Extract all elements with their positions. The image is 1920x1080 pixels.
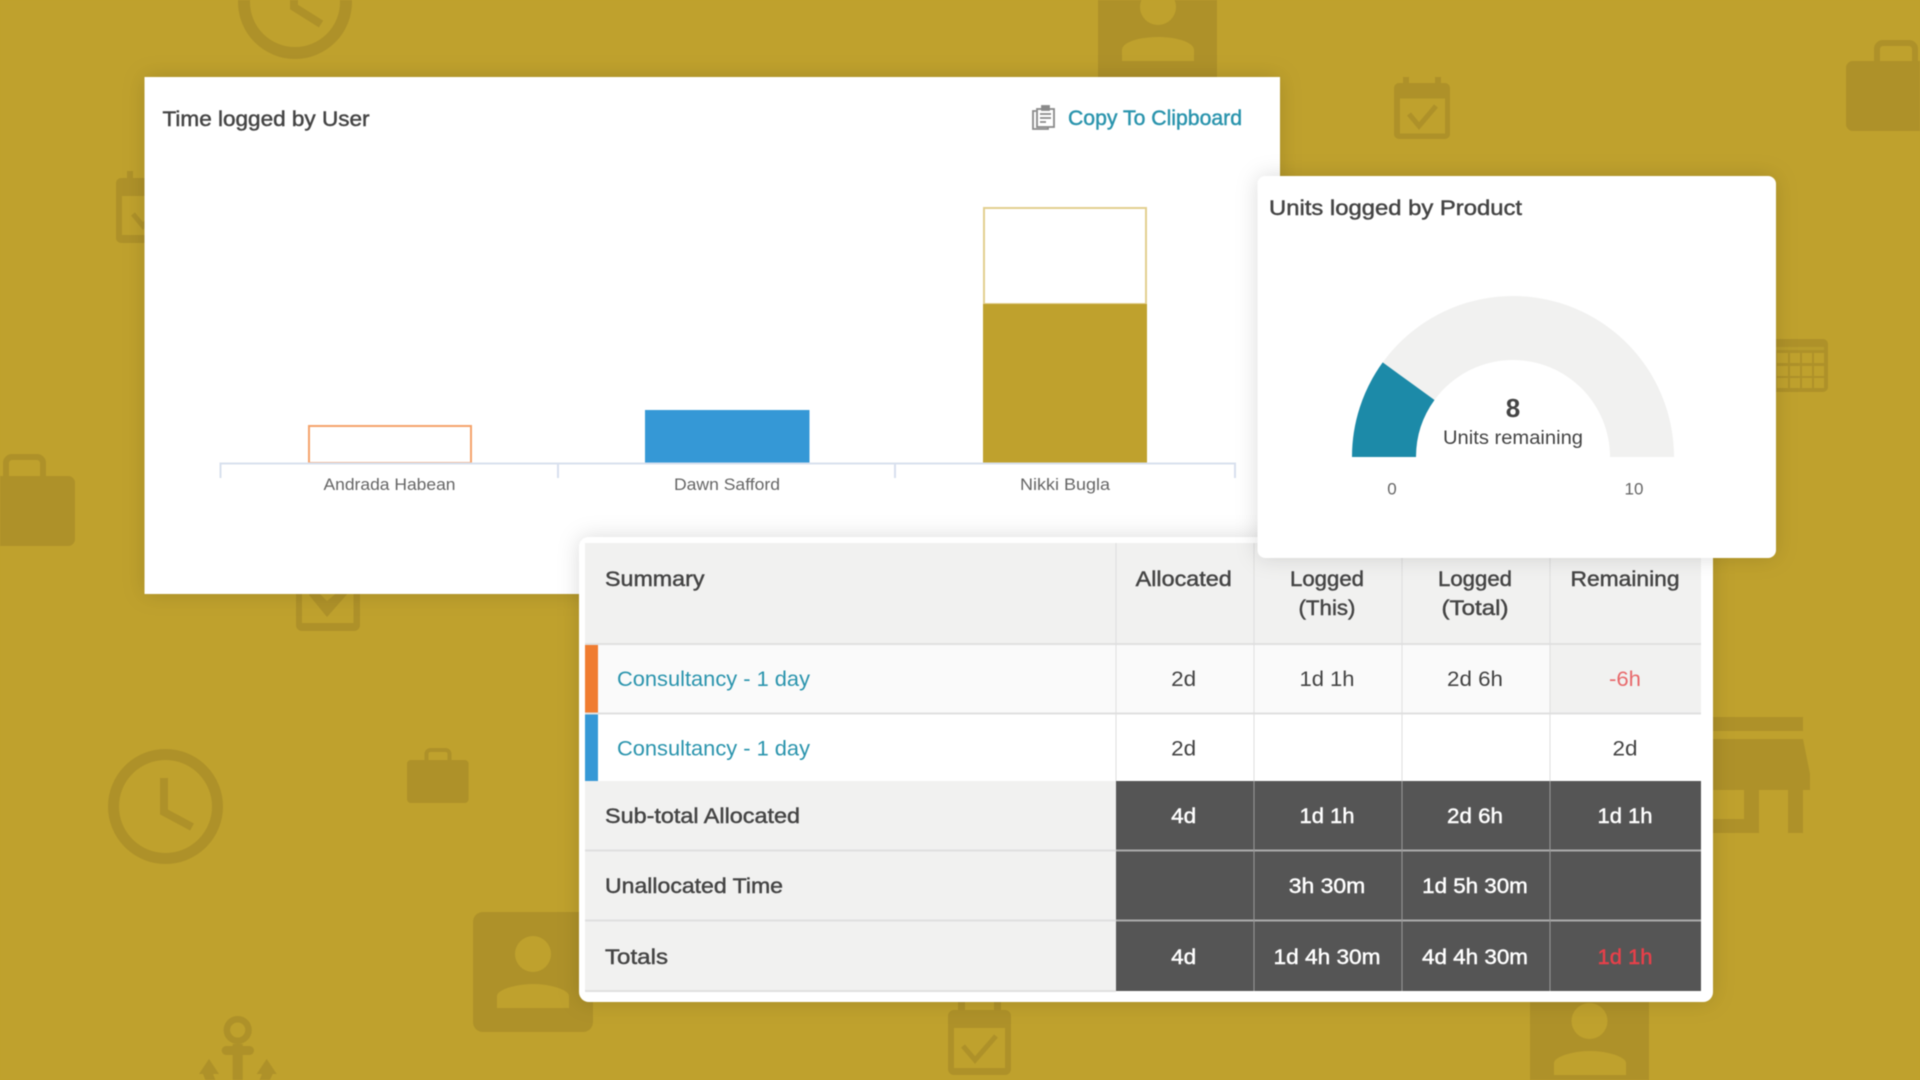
icon: store bbox=[1700, 717, 1810, 833]
bar: Nikki Bugla bbox=[983, 208, 1147, 463]
panel: units logged by product bbox=[1258, 176, 1776, 558]
header labels bbox=[605, 568, 1680, 620]
icon: calendar left bbox=[116, 171, 172, 243]
row: consultancy 1: 2d 6h bbox=[1447, 668, 1503, 691]
row: unallocated time: Unallocated Time bbox=[605, 875, 783, 898]
row: consultancy 1: Consultancy - 1 day bbox=[617, 668, 811, 691]
row backgrounds bbox=[598, 644, 1701, 781]
row: unallocated time: 3h 30m bbox=[1289, 875, 1365, 898]
axis bbox=[220, 464, 1235, 478]
row: totals: Totals bbox=[605, 946, 668, 969]
row: totals: 4d bbox=[1171, 946, 1196, 969]
header labels: Allocated bbox=[1136, 568, 1232, 591]
icon: calendar under chart bbox=[296, 560, 360, 631]
row: unallocated time: 1d 5h 30m bbox=[1422, 875, 1528, 898]
row: sub-total allocated: 2d 6h bbox=[1447, 805, 1503, 828]
row: consultancy 2: 2d bbox=[1612, 738, 1638, 760]
row: consultancy 1 bbox=[617, 668, 1641, 691]
gauge chart bbox=[1352, 296, 1674, 498]
gauge min: 0 bbox=[1387, 480, 1397, 498]
icon: briefcase small bbox=[407, 750, 469, 803]
icon: person bottom left bbox=[473, 912, 593, 1032]
bar chart bbox=[220, 208, 1235, 494]
icon: clipboard bbox=[1033, 106, 1054, 129]
gauge value bbox=[1352, 362, 1434, 457]
link: copy to clipboard: Copy To Clipboard bbox=[1068, 107, 1242, 130]
grid lines bbox=[585, 543, 1701, 991]
row: consultancy 1: 2d bbox=[1171, 668, 1196, 691]
table header row bbox=[585, 543, 1701, 643]
icon: briefcase left bbox=[0, 457, 75, 546]
row: totals bbox=[605, 946, 1652, 969]
label: Andrada Habean: Andrada Habean bbox=[324, 475, 456, 494]
icon: calendar bottom bbox=[948, 1000, 1011, 1075]
icon: anchor bbox=[199, 1019, 277, 1080]
row: sub-total allocated: 4d bbox=[1171, 805, 1196, 828]
icon: calendar top bbox=[1394, 77, 1450, 139]
heading: time logged by user: Time logged by User bbox=[162, 108, 370, 131]
row: sub-total allocated bbox=[605, 805, 1652, 828]
gauge track bbox=[1352, 296, 1674, 457]
panel: time logged by user bbox=[144, 77, 1280, 594]
row: sub-total allocated: Sub-total Allocated bbox=[605, 805, 800, 828]
colour key: orange bbox=[585, 644, 598, 713]
header labels: Summary bbox=[605, 568, 705, 591]
icon: clock top bbox=[244, 0, 346, 53]
row: sub-total allocated: 1d 1h bbox=[1300, 805, 1354, 828]
row: unallocated time bbox=[605, 875, 1528, 898]
row: sub-total allocated: 1d 1h bbox=[1598, 805, 1652, 828]
header labels: Logged bbox=[1438, 568, 1512, 591]
row: consultancy 1: -6h bbox=[1609, 668, 1641, 691]
row: consultancy 2: Consultancy - 1 day bbox=[617, 738, 811, 760]
header labels: Logged bbox=[1290, 568, 1364, 591]
icon: briefcase right bbox=[1846, 43, 1920, 131]
row: totals: 1d 1h bbox=[1598, 946, 1652, 969]
row: consultancy 1: 1d 1h bbox=[1300, 668, 1354, 691]
icon: person top bbox=[1098, 0, 1217, 80]
gauge number: 8 bbox=[1506, 393, 1520, 423]
label: Dawn Safford: Dawn Safford bbox=[674, 475, 780, 494]
label: Nikki Bugla: Nikki Bugla bbox=[1020, 475, 1111, 494]
row: consultancy 2: 2d bbox=[1171, 738, 1196, 760]
row: consultancy 2 bbox=[617, 738, 1638, 760]
heading: units logged by product: Units logged by Product bbox=[1269, 197, 1522, 220]
header labels: (This) bbox=[1298, 597, 1356, 620]
bar: Andrada Habean bbox=[309, 426, 471, 463]
panel: summary table bbox=[579, 537, 1713, 1002]
icon: calendar grid bbox=[1750, 339, 1828, 392]
gauge caption: Units remaining bbox=[1443, 428, 1583, 449]
gauge max: 10 bbox=[1625, 480, 1643, 498]
bar: Dawn Safford bbox=[645, 410, 810, 463]
header labels: Remaining bbox=[1570, 568, 1680, 591]
label cells bbox=[585, 781, 1116, 991]
dark total cells bbox=[1116, 781, 1701, 991]
icon: person bottom right bbox=[1530, 990, 1649, 1080]
colour key: blue bbox=[585, 713, 598, 781]
row: totals: 1d 4h 30m bbox=[1274, 946, 1380, 969]
icon: clock bottom left bbox=[114, 754, 218, 858]
header labels: (Total) bbox=[1442, 597, 1508, 620]
row: totals: 4d 4h 30m bbox=[1422, 946, 1528, 969]
